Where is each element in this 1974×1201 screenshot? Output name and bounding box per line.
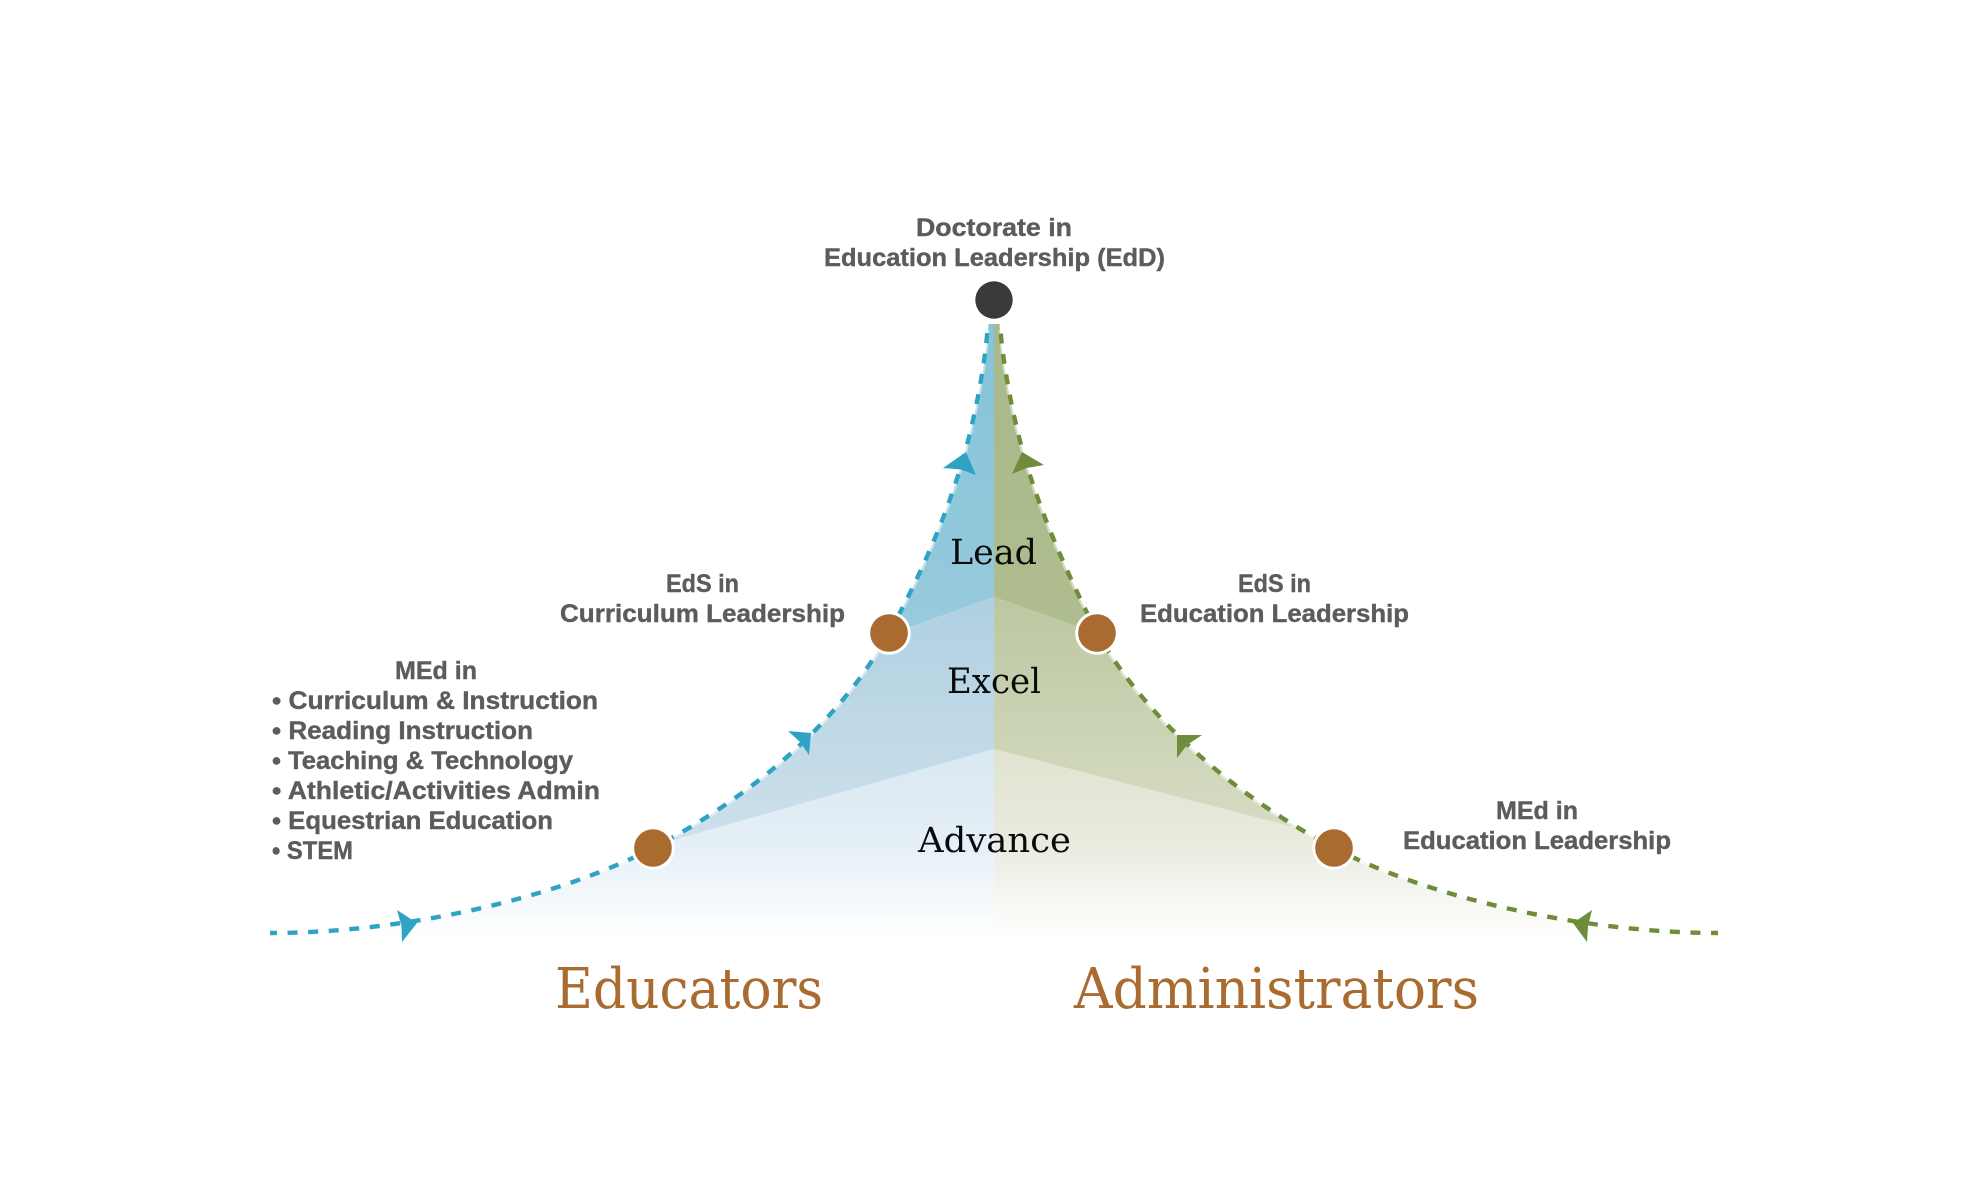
band: lead administrators: [994, 324, 1086, 626]
band label: Excel: Excel: [947, 662, 1041, 702]
band: advance administrators: [994, 749, 1518, 914]
band: advance educators: [491, 749, 994, 908]
arrow: educators top: [943, 452, 976, 475]
label: MEd education leadership: MEd in: [1496, 797, 1578, 825]
infographic: pathway diagram: [270, 218, 1718, 1009]
label: MEd educators list: • Teaching & Technology: [272, 747, 573, 775]
label: EdS curriculum leadership: EdS in: [666, 570, 739, 598]
label: MEd educators list: • Curriculum & Instruction: [272, 687, 598, 715]
label: MEd education leadership: [1403, 797, 1671, 855]
label: EdS education leadership: Education Leadership: [1140, 600, 1409, 628]
label: MEd educators list: [272, 657, 600, 865]
label: doctorate: Doctorate in: [916, 214, 1072, 242]
label: MEd educators list: • Equestrian Education: [272, 807, 553, 835]
band label: Lead: Lead: [950, 533, 1037, 573]
panel: administrators wedge: [994, 324, 1518, 914]
label: EdS education leadership: [1140, 570, 1409, 628]
arrow: educators bottom: [397, 910, 417, 942]
label: MEd educators list: MEd in: [395, 657, 477, 685]
label: EdS curriculum leadership: Curriculum Leadership: [560, 600, 845, 628]
label: doctorate: [824, 214, 1165, 272]
node: MEd educators: [633, 828, 673, 868]
node: EdS education: [1077, 613, 1117, 653]
label: MEd education leadership: Education Leadership: [1403, 827, 1671, 855]
label: MEd educators list: • Reading Instruction: [272, 717, 533, 745]
label: MEd educators list: • Athletic/Activities Admin: [272, 777, 600, 805]
heading: Administrators: Administrators: [1073, 957, 1479, 1022]
arrow: educators middle: [788, 731, 811, 755]
label: MEd educators list: • STEM: [272, 837, 353, 865]
arrow: administrators top: [1012, 452, 1044, 474]
panel: educators wedge: [491, 324, 994, 908]
node: MEd administrators: [1314, 828, 1354, 868]
arrow: administrators middle: [1177, 735, 1202, 758]
administrators path: dashed curve: [1000, 330, 1718, 933]
label: doctorate: Education Leadership (EdD): [824, 244, 1165, 272]
band label: Advance: Advance: [917, 821, 1071, 861]
band: excel administrators: [994, 597, 1296, 828]
node: EdS curriculum: [869, 613, 909, 653]
label: EdS education leadership: EdS in: [1238, 570, 1311, 598]
band: lead educators: [901, 324, 994, 627]
heading: Educators: Educators: [555, 957, 823, 1022]
band: excel educators: [673, 597, 994, 840]
label: EdS curriculum leadership: [560, 570, 845, 628]
arrow: administrators bottom: [1573, 910, 1592, 942]
educators path: dashed curve: [270, 330, 988, 933]
node: doctorate: [975, 281, 1013, 319]
